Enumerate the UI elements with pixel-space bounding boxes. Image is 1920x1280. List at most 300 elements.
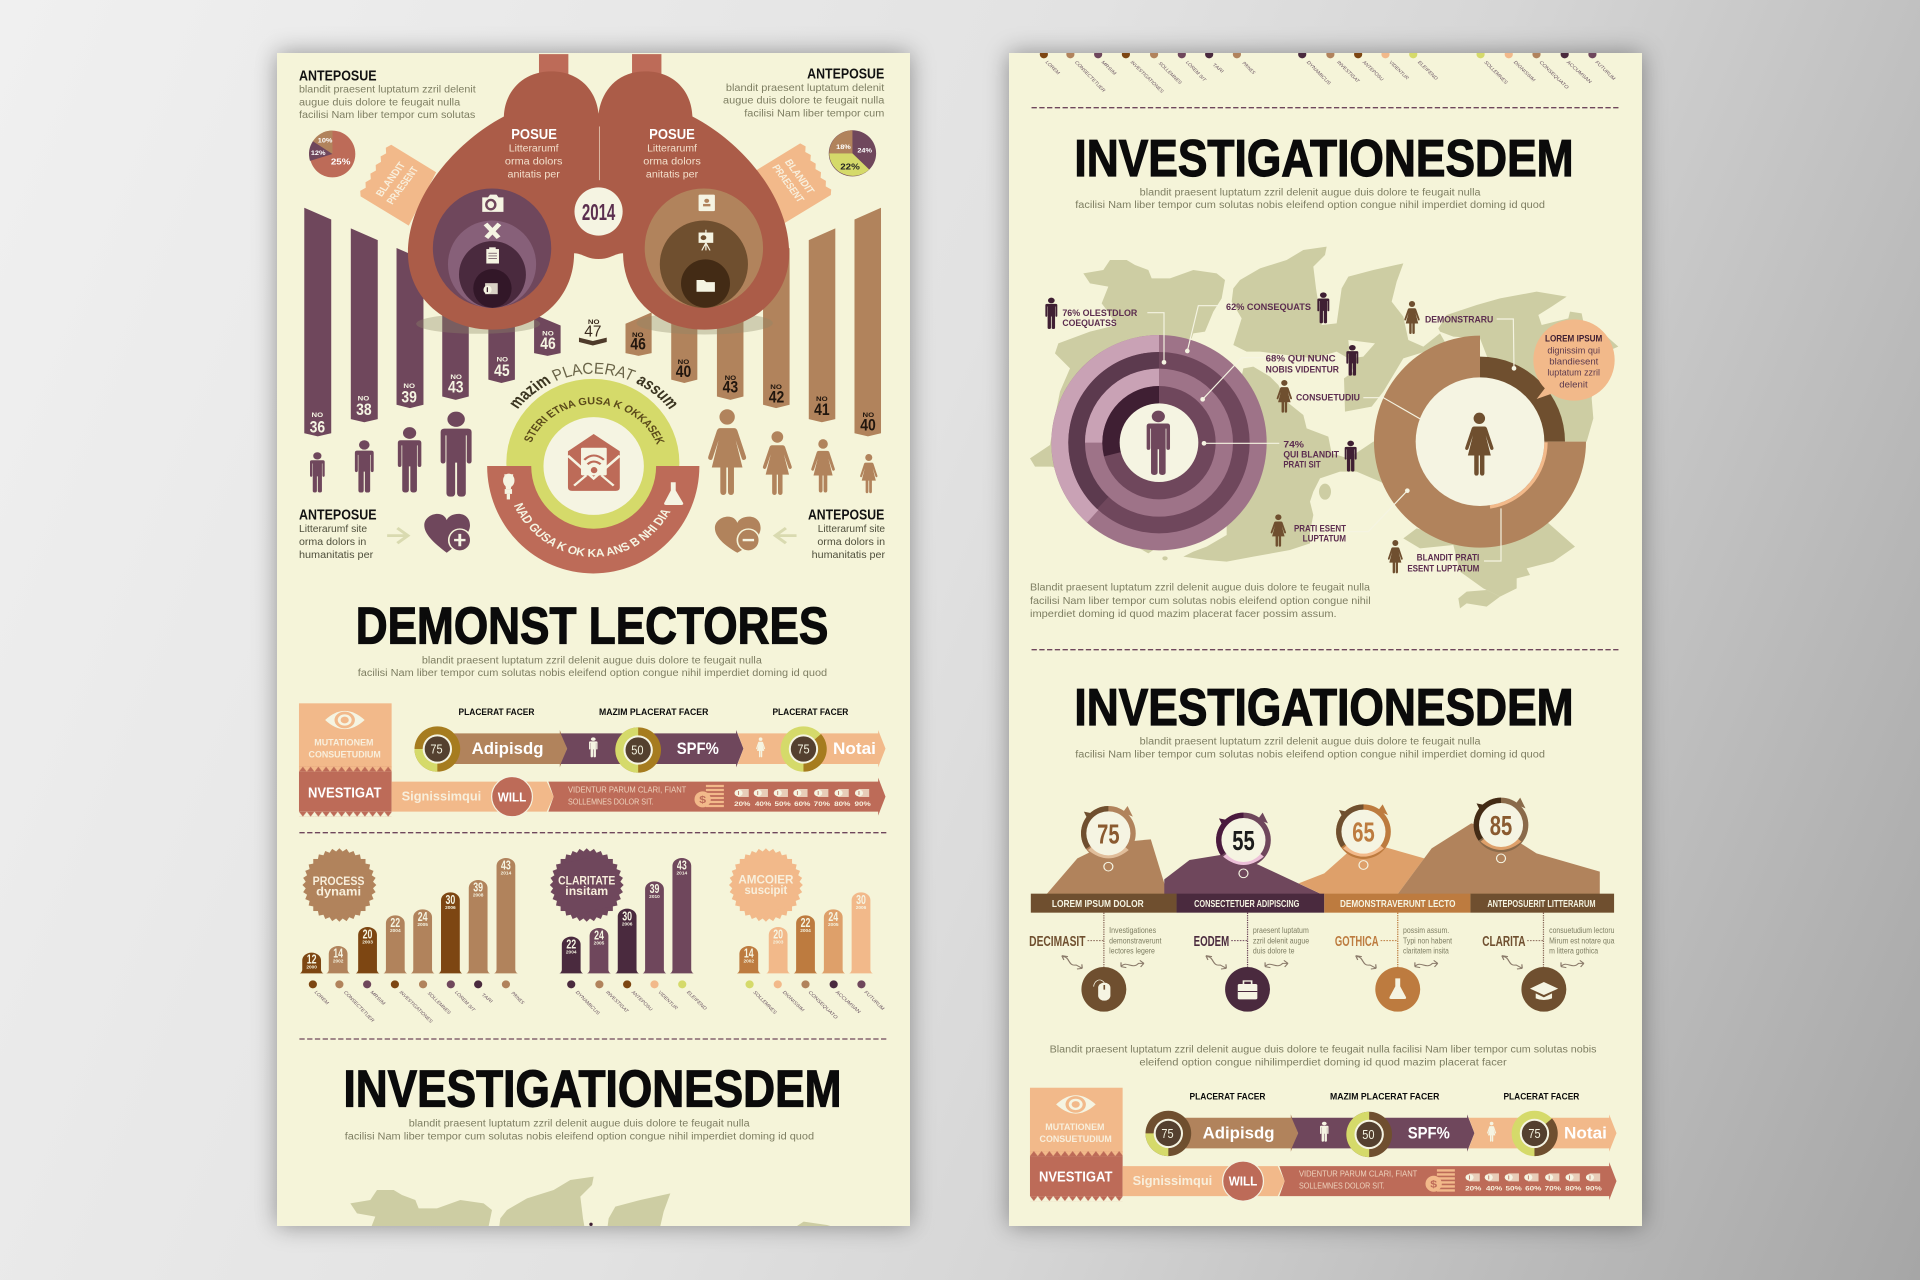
subtitle: right two: facilisi Nam liber tempor cum solutas nobis eleifend option congue nihil imperdiet doming id quod	[1075, 749, 1545, 760]
badge 85: 85	[1490, 810, 1512, 841]
seal: process dynami: dynami	[316, 885, 361, 898]
section: right data strip	[1030, 1088, 1617, 1201]
gauge 50	[1346, 1112, 1392, 1157]
mini money scale: 60%	[1525, 1184, 1542, 1192]
section: right sheet top overflow labels: SOLLEMNES	[1156, 61, 1183, 85]
section: mountains chart	[1029, 798, 1615, 1012]
map: cropped top of map on left sheet	[350, 1177, 830, 1226]
gauge 50	[615, 727, 661, 773]
paragraph: right lower body text	[1050, 1045, 1597, 1068]
section: right sheet top overflow labels: VIDENTUR	[1387, 60, 1410, 81]
text: column descriptions: m littera gothica	[1549, 947, 1599, 955]
labels: map callouts: BLANDIT PRATI	[1417, 553, 1479, 563]
arrow band row one	[1168, 1114, 1617, 1152]
subtitle: facilisi Nam liber tempor cum solutas nobis eleifend option congue nihil imperdiet doming id quod	[358, 668, 827, 679]
chart legend dots and labels: CONSEQUATO	[806, 990, 839, 1020]
donut chart: women	[1374, 336, 1586, 548]
bar chart: first group: 2002	[333, 959, 344, 964]
marker: no 47: 47	[584, 322, 601, 340]
icon: folder	[697, 280, 715, 292]
necks above lobes	[539, 54, 661, 78]
text: column descriptions: Mirum est notare qua	[1549, 936, 1615, 945]
seal: amcoier suscipit: AMCOIER	[738, 873, 794, 886]
bar chart: second group: 2006	[622, 922, 633, 927]
arrow band row one: SPF%	[1408, 1123, 1450, 1142]
arrow band row one: Notai	[1564, 1123, 1607, 1142]
central mail roundel	[487, 362, 700, 574]
bars: purple descending columns: NO	[358, 395, 370, 402]
icon: mouse	[1081, 967, 1126, 1012]
section: right sheet top overflow labels: PRINES	[1240, 61, 1256, 75]
label block: mutationem: NVESTIGAT	[1039, 1169, 1112, 1185]
section: right sheet top overflow labels: ACCUMSAN	[1565, 60, 1593, 85]
gauge 75 first	[1145, 1111, 1191, 1156]
section: map with donuts	[1030, 247, 1618, 620]
label block: mutationem: NVESTIGAT	[308, 785, 381, 801]
section: right sheet top overflow labels: INVESTIGAT	[1335, 60, 1361, 84]
chart legend dots and labels: LOREM	[312, 990, 330, 1006]
people: map men	[1045, 292, 1358, 472]
seal: claritate insitam: CLARITATE	[558, 874, 615, 887]
text block: lower right anteposue: Litterarumf site	[818, 524, 885, 535]
mini money scale: 50%	[774, 800, 791, 808]
chart legend dots and labels: INVESTIGAT	[604, 990, 630, 1014]
text block: top right anteposue: blandit praesent luptatum delenit	[726, 83, 885, 94]
subtitle: left investigationesdem: blandit praesent luptatum zzril delenit augue duis dolore te feugait nulla	[409, 1119, 750, 1129]
mini money scale: 40%	[755, 800, 772, 808]
text block: lower left anteposue	[299, 506, 377, 561]
text block: lower left anteposue: orma dolors in	[299, 537, 366, 548]
labels: map callouts: COEQUATSS	[1062, 318, 1117, 328]
bars: purple descending columns: 45	[494, 361, 510, 379]
badge 65	[1336, 804, 1391, 869]
pie chart: left: 10%	[318, 138, 332, 144]
bar chart: first group: 2006	[445, 905, 456, 911]
bar chart: third group: 2006	[856, 905, 866, 911]
section: left data strip	[299, 703, 886, 817]
bar chart: third group: 2002	[743, 959, 754, 964]
section: right heading two	[1032, 650, 1619, 760]
body text: map caption: Blandit praesent luptatum zzril delenit augue duis dolore te feugait nulla	[1030, 583, 1370, 594]
bar chart: second group: 2004	[566, 950, 577, 955]
subtitle: left investigationesdem: facilisi Nam liber tempor cum solutas nobis eleifend option congue nihil imperdiet doming id quod	[345, 1131, 814, 1142]
label block: mutationem: MUTATIONEM	[314, 739, 373, 748]
labels: map callouts: LUPTATUM	[1303, 534, 1346, 544]
labels: map callouts: 74%	[1283, 439, 1305, 449]
labels: column words: DECIMASIT	[1029, 933, 1086, 950]
section: right sheet top overflow labels: FUTURUM	[1593, 60, 1617, 81]
arrow band row one	[437, 730, 886, 767]
section: right sheet top overflow labels	[1040, 50, 1617, 94]
text block: lower left anteposue: humanitatis per	[299, 550, 373, 561]
marker: no 47	[579, 319, 607, 345]
section: right sheet top overflow labels: INVESTIGATIONES	[1128, 60, 1165, 94]
bar chart: first group: 43	[501, 858, 511, 872]
arrow band row two: WILL	[1229, 1174, 1258, 1188]
squiggle arrows	[1062, 956, 1584, 969]
arrow band row one: Adipisdg	[472, 739, 543, 758]
icon: open mail with wifi	[568, 434, 620, 491]
text block: lower left anteposue: ANTEPOSUE	[299, 506, 377, 523]
section: right sheet top overflow labels: ELEIFEND	[1416, 60, 1439, 82]
gauge 75 first	[414, 726, 460, 772]
section: top anatomy diagram	[299, 54, 885, 574]
bar chart: second group	[559, 858, 694, 973]
labels: column words	[1029, 933, 1526, 950]
icon: camera	[482, 195, 503, 212]
badge 55: 55	[1232, 825, 1255, 856]
bars: tan rising columns: NO	[678, 359, 690, 366]
callout bubble: lorem ipsum: dignissim qui	[1547, 345, 1600, 355]
bars: tan rising columns: 40	[860, 416, 876, 434]
labels: map callouts: CONSUETUDIU	[1296, 393, 1360, 403]
text block: lower right anteposue	[808, 506, 885, 561]
icon: presentation board	[699, 230, 713, 250]
arrow band row one: SPF%	[677, 739, 719, 758]
labels: map callouts: 62% CONSEQUATS	[1226, 302, 1311, 312]
bars: tan rising columns: NO	[863, 412, 875, 419]
bar chart: third group: 24	[828, 909, 838, 924]
text block: top right anteposue: augue duis dolore te feugait nulla	[723, 96, 885, 106]
year badge 2014	[574, 187, 623, 236]
icon: heart plus	[424, 514, 471, 553]
gauge 75 first: 75	[430, 743, 443, 757]
mountains	[1047, 823, 1600, 894]
bars: tan rising columns: NO	[770, 384, 782, 391]
seal: process dynami: PROCESS	[313, 874, 365, 888]
bar chart: first group	[300, 858, 518, 973]
headings	[1190, 1092, 1580, 1102]
nested ovals: brown with icons	[645, 188, 763, 308]
bar chart: third group: 2004	[800, 928, 811, 934]
labels: map callouts: PRATI ESENT	[1294, 524, 1346, 534]
bars: purple descending columns: 43	[448, 378, 463, 396]
icon: money document	[483, 283, 498, 294]
labels: map callouts: DEMONSTRARU	[1425, 315, 1494, 325]
bar chart: first group: 24	[418, 909, 428, 924]
curved text: steri etna: STERI ETNA GUSA K OKKASEK	[524, 397, 665, 445]
bar chart: first group: 2014	[501, 871, 511, 876]
chart legend dots and labels: CONSECTETUER	[342, 990, 376, 1024]
bars: tan rising columns: NO	[632, 331, 644, 339]
text block: top left anteposue: ANTEPOSUE	[299, 67, 377, 84]
arrow band row two: SOLLEMNES DOLOR SIT.	[1299, 1182, 1385, 1191]
bars: purple descending columns: NO	[542, 330, 554, 337]
chart legend dots and labels: ACCUMSAN	[834, 990, 862, 1015]
arrow band row two: Signissimqui	[1133, 1173, 1212, 1188]
bars: tan rising columns: 41	[814, 400, 830, 419]
bar chart: second group: 2010	[649, 894, 660, 900]
bar chart: third group: 14	[744, 946, 754, 960]
section: right sheet top overflow labels: TARI	[1210, 62, 1225, 74]
dotted connectors	[1088, 913, 1543, 968]
title: right investigationesdem one: INVESTIGATIONESDEM	[1074, 130, 1574, 188]
bar chart: first group: 2003	[362, 940, 373, 945]
text: column descriptions: consuetudium lectoru	[1549, 926, 1614, 935]
arrow band row two	[392, 777, 886, 817]
text: posue left	[505, 127, 563, 180]
ribbon: right blandit praesent: BLANDIT	[782, 158, 816, 196]
bar chart: second group: 24	[594, 928, 604, 942]
mini money scale	[734, 789, 871, 808]
text block: lower right anteposue: orma dolors in	[817, 537, 885, 548]
badge 55	[1216, 813, 1271, 878]
section: right sheet top overflow labels: DYNAMICUS	[1305, 60, 1332, 86]
bars: purple descending columns: 38	[356, 400, 372, 419]
text block: lower right anteposue: humanitatis per	[812, 550, 885, 561]
pie chart: right	[829, 130, 876, 176]
badge 75	[1081, 806, 1136, 871]
bars: tan rising columns: 43	[723, 378, 738, 396]
mini money scale: 80%	[834, 800, 851, 808]
seal: claritate insitam: insitam	[565, 884, 608, 898]
bar: category headers: ANTEPOSUERIT LITTERARUM	[1487, 899, 1596, 910]
bars: purple descending columns: NO	[496, 356, 509, 363]
mini money scale: 60%	[794, 800, 811, 808]
text: posue left: Litterarumf	[509, 143, 559, 154]
arrow: left pointing	[775, 528, 797, 543]
title: DEMONST LECTORES	[356, 598, 828, 655]
text: column descriptions	[1109, 926, 1615, 955]
bar chart: first group: 30	[446, 892, 455, 907]
leader dots	[1162, 349, 1516, 493]
body text: map caption: facilisi Nam liber tempor cum solutas nobis eleifend option congue nihil	[1030, 596, 1371, 607]
bars: purple descending columns: 46	[540, 334, 556, 353]
pie chart: left	[309, 131, 355, 177]
bar: category headers	[1031, 894, 1614, 913]
bars: tan rising columns: 40	[676, 363, 691, 381]
chart legend dots and labels: FUTURUM	[862, 990, 886, 1011]
icon: flask	[1375, 967, 1420, 1012]
text: posue left: POSUE	[511, 127, 557, 143]
chart legend dots and labels: SOLLEMNES	[751, 990, 778, 1015]
subtitle: right one: facilisi Nam liber tempor cum solutas nobis eleifend option congue nihil imperdiet doming id quod	[1075, 200, 1545, 211]
badge 75: 75	[1097, 818, 1120, 850]
text: column descriptions: claritatem insita	[1403, 947, 1449, 955]
text block: lower left anteposue: Litterarumf site	[299, 524, 367, 535]
mini money scale: 50%	[1505, 1184, 1522, 1192]
badge 85	[1474, 798, 1528, 863]
text block: top left anteposue: augue duis dolore te feugait nulla	[299, 97, 461, 108]
text: column descriptions: duis dolore te	[1253, 947, 1294, 955]
paragraph: right lower body text: Blandit praesent luptatum zzril delenit augue duis dolore te feugait nulla facilisi Nam liber tempor cum solutas nobis	[1050, 1045, 1597, 1055]
callout bubble: lorem ipsum: delenit	[1559, 379, 1588, 389]
section: right heading one	[1032, 108, 1619, 211]
bars: purple descending columns: NO	[312, 412, 324, 419]
icon: address book	[699, 195, 715, 211]
map silhouette	[1030, 247, 1618, 608]
curved text: mazim placerat assum: mazim PLACERAT assum	[510, 362, 676, 410]
gauge 50: 50	[1362, 1128, 1374, 1143]
shadows beneath lobes	[416, 312, 773, 334]
pie chart: left: 12%	[311, 150, 326, 157]
bars: purple descending columns: 39	[401, 388, 417, 406]
section: right sheet top overflow labels: ANTEPOSU	[1361, 60, 1385, 82]
icon: crossed tools	[486, 224, 499, 238]
label block: mutationem	[1030, 1088, 1123, 1201]
text: posue left: anitatis per	[508, 169, 560, 180]
headings: PLACERAT FACER	[1190, 1092, 1266, 1102]
labels: column words: GOTHICA	[1335, 933, 1379, 950]
mini money scale: 20%	[734, 800, 751, 808]
chart legend dots and labels: PRINES	[509, 991, 525, 1005]
bars: purple descending columns: 36	[310, 418, 325, 436]
section: bar charts	[299, 833, 887, 1142]
seal: amcoier suscipit	[729, 848, 803, 922]
bar chart: first group: 12	[307, 952, 317, 966]
bar chart: second group: 43	[677, 858, 687, 872]
text block: top left anteposue: facilisi Nam liber tempor cum solutas	[299, 110, 476, 121]
text: posue left: orma dolors	[505, 156, 563, 167]
bar chart: third group: 30	[856, 892, 866, 907]
icon: flask	[664, 482, 683, 505]
section: demonst lectores heading	[356, 598, 828, 679]
ribbon: left blandit praesent	[360, 145, 436, 226]
icon: light bulb	[503, 474, 514, 499]
labels: column words: EODEM	[1194, 933, 1229, 950]
bar chart: first group: 2005	[417, 922, 428, 928]
text block: top right anteposue	[723, 65, 885, 119]
bar chart: first group: 2004	[390, 928, 401, 934]
bar chart: first group: 2000	[306, 965, 317, 970]
label block: mutationem: MUTATIONEM	[1045, 1123, 1104, 1133]
bar chart: first group: 14	[333, 946, 343, 960]
body text: map caption	[1030, 583, 1371, 620]
ribbon: left blandit praesent: BLANDIT	[374, 160, 409, 199]
section: right sheet top overflow labels: MRSIM	[1099, 60, 1117, 76]
arrow band row two: $	[699, 795, 707, 806]
callout bubble: lorem ipsum: luptatum zzril	[1547, 368, 1600, 378]
seal: process dynami	[302, 848, 376, 922]
panel: left poster sheet	[277, 53, 910, 1226]
bar chart: second group: 30	[622, 909, 632, 923]
section: right sheet top overflow labels: LOREM SIT	[1184, 60, 1207, 83]
subtitle: right one: blandit praesent luptatum zzril delenit augue duis dolore te feugait nulla	[1140, 187, 1481, 198]
text block: top right anteposue: facilisi Nam liber tempor cum	[744, 108, 884, 119]
chart legend dots and labels: MRSIM	[368, 990, 386, 1006]
gauge 75 second	[1512, 1111, 1558, 1156]
bar chart: second group: 39	[650, 881, 659, 896]
mini money scale: 80%	[1565, 1184, 1582, 1192]
bar chart: first group: 2008	[473, 893, 484, 898]
bar chart: third group: 22	[801, 915, 810, 930]
ribbon: right blandit praesent	[755, 143, 831, 224]
paragraph: right lower body text: eleifend option congue nihilimperdiet doming id quod mazim placerat facer	[1139, 1057, 1507, 1068]
arrow band row two	[1123, 1161, 1617, 1201]
chart legend dots and labels: ANTEPOSU	[630, 990, 654, 1012]
section: right sheet top overflow labels: DIGNISSIM	[1512, 60, 1537, 83]
icon: clipboard	[486, 247, 499, 264]
bar chart: first group: 39	[473, 880, 483, 894]
people: men growing	[310, 412, 472, 497]
seal: amcoier suscipit: suscipit	[744, 883, 788, 897]
arrow band row one: Adipisdg	[1203, 1123, 1274, 1142]
text: column descriptions: zzril delenit augue	[1253, 936, 1309, 945]
bars: purple descending columns: NO	[403, 383, 415, 390]
mini money scale: 70%	[1545, 1184, 1561, 1192]
seal: claritate insitam	[550, 848, 624, 922]
callout bubble: lorem ipsum	[1533, 319, 1615, 401]
text: column descriptions: Typi non habent	[1403, 936, 1452, 945]
body text: map caption: imperdiet doming id quod mazim placerat facer possim assum.	[1030, 609, 1337, 620]
central double lobe body	[408, 71, 789, 330]
labels: map callouts: 68% QUI NUNC	[1266, 354, 1336, 364]
bar chart: second group: 22	[566, 937, 576, 951]
mini money scale: 20%	[1465, 1184, 1482, 1192]
mini money scale: 40%	[1486, 1184, 1503, 1192]
headings: MAZIM PLACERAT FACER	[1330, 1092, 1440, 1102]
text: posue right: POSUE	[649, 127, 695, 143]
icon: graduation cap	[1521, 967, 1566, 1012]
labels: map callouts	[1062, 302, 1494, 573]
donut chart: men	[1051, 335, 1267, 550]
gauge 75 first: 75	[1161, 1127, 1174, 1142]
text: column descriptions: lectores legere	[1109, 947, 1155, 955]
people: map women	[1271, 301, 1420, 573]
nested ovals: purple with icons	[433, 188, 551, 308]
gauge 75 second: 75	[1528, 1127, 1541, 1142]
bar chart: third group: 20	[773, 927, 783, 941]
labels: column words: CLARITA	[1482, 933, 1526, 950]
bar: category headers: DEMONSTRAVERUNT LECTO	[1340, 899, 1456, 910]
mini money scale	[1465, 1173, 1602, 1192]
section: right sheet top overflow labels: LOREM	[1043, 60, 1061, 76]
headings	[459, 708, 849, 718]
text block: top left anteposue	[299, 67, 477, 121]
text: column descriptions: Investigationes	[1109, 926, 1156, 935]
text block: top right anteposue: ANTEPOSUE	[807, 65, 884, 82]
pie chart: right: 22%	[840, 162, 860, 171]
callout bubble: lorem ipsum: blandiesent	[1549, 356, 1599, 366]
year badge 2014: 2014	[582, 200, 616, 225]
bar chart: first group: 20	[363, 927, 373, 941]
subtitle: right two	[1075, 737, 1545, 760]
subtitle	[358, 655, 827, 679]
labels: map callouts: QUI BLANDIT	[1283, 449, 1339, 459]
arrow band row two: SOLLEMNES DOLOR SIT.	[568, 797, 654, 806]
title: right investigationesdem two: INVESTIGATIONESDEM	[1074, 679, 1574, 737]
text block: top left anteposue: blandit praesent luptatum zzril delenit	[299, 84, 477, 95]
bar chart: third group: 2005	[828, 922, 839, 928]
panel: right poster sheet	[1009, 53, 1642, 1226]
gauge 75 second	[781, 726, 827, 772]
text: posue right: anitatis per	[646, 169, 698, 180]
pie chart: right: 24%	[857, 148, 872, 154]
chart legend dots and labels: VIDENTUR	[656, 990, 679, 1011]
marker: no 47: NO	[588, 319, 600, 326]
section: right sheet top overflow labels: CONSECTETUER	[1073, 60, 1107, 94]
text: posue right: Litterarumf	[647, 143, 698, 154]
ribbon: left blandit praesent: PRAESENT	[385, 165, 422, 206]
label block: mutationem: CONSUETUDIUM	[309, 751, 381, 760]
gauge 75 second: 75	[797, 743, 810, 757]
chart legend dots and labels: DYNAMICUS	[574, 990, 601, 1016]
bar: category headers: LOREM IPSUM DOLOR	[1052, 899, 1144, 910]
mini money scale: 70%	[814, 800, 830, 808]
section: right sheet top overflow labels: CONSEQUATO	[1537, 60, 1570, 90]
icon: heart minus	[715, 517, 761, 553]
arrow: right pointing	[387, 528, 408, 543]
bar: category headers: CONSECTETUER ADIPISCING	[1194, 899, 1299, 910]
label block: mutationem: CONSUETUDIUM	[1040, 1135, 1112, 1145]
bar chart: second group: 2005	[594, 941, 604, 946]
section: right sheet top overflow labels: SOLLEMNES	[1482, 60, 1509, 85]
text: column descriptions: possim assum.	[1403, 926, 1449, 935]
mini money scale: 90%	[1585, 1184, 1602, 1192]
bar chart: second group: 2014	[677, 871, 687, 876]
text: column descriptions: praesent luptatum	[1253, 926, 1309, 935]
arrow band row two: Signissimqui	[402, 789, 481, 803]
